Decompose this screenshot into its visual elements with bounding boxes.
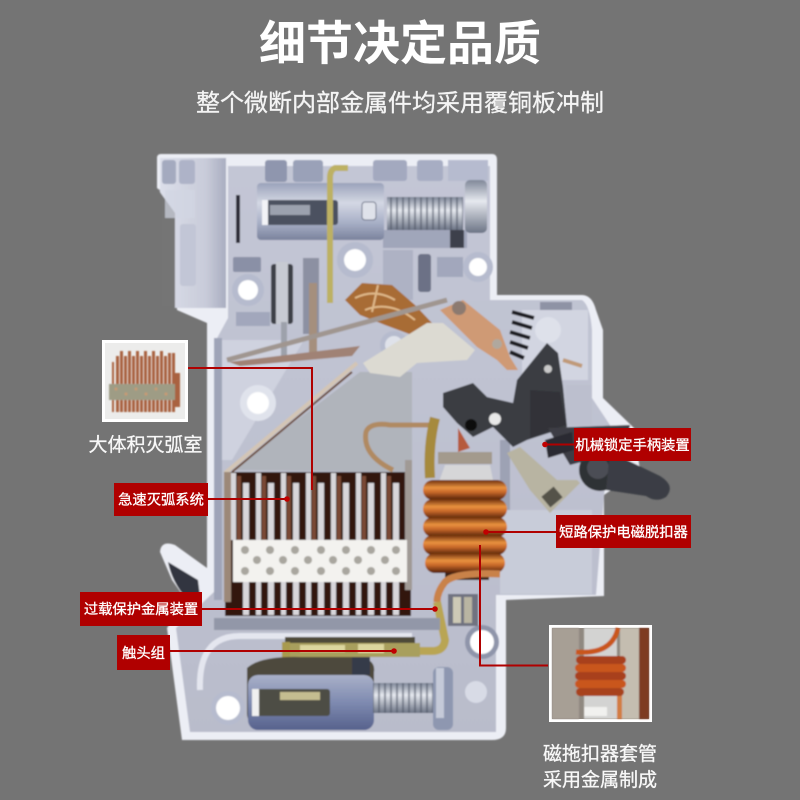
overload brass strip <box>395 602 445 651</box>
left rail <box>214 338 222 600</box>
mounting holes <box>211 242 561 725</box>
right pockets <box>500 302 592 594</box>
bottom contact assembly <box>282 637 420 704</box>
hook latch <box>168 562 200 598</box>
chamber base rib <box>214 618 440 630</box>
white plate <box>233 540 407 582</box>
callout: 急速灭弧系统: 急速灭弧系统 <box>118 492 204 508</box>
callout: 机械锁定手柄装置: 机械锁定手柄装置 <box>575 437 690 454</box>
bottom terminal clamp <box>247 657 453 730</box>
tan slider <box>507 447 580 513</box>
silver contact tip <box>438 452 492 464</box>
thumbnail: magnetic coil sleeve <box>549 625 652 722</box>
yellow coil end <box>430 418 435 478</box>
curved inner wall <box>200 636 412 690</box>
connector line: arc chute callout <box>188 368 312 490</box>
caption: magnetic coil sleeve: 磁拖扣器套管 <box>543 743 657 765</box>
callout: 过载保护金属装置 <box>80 592 438 626</box>
title: 细节决定品质 <box>259 17 541 70</box>
thumbnail: arc chamber <box>102 340 188 422</box>
copper moving arm <box>440 300 518 370</box>
arc chamber grey cavity <box>232 372 412 472</box>
caption: magnetic coil sleeve <box>543 743 657 791</box>
callout: 触头组 <box>117 635 397 670</box>
handle <box>545 425 670 500</box>
callout: 短路保护电磁脱扣器: 短路保护电磁脱扣器 <box>559 524 688 541</box>
diagonal rod <box>227 300 447 360</box>
subtitle: 整个微断内部金属件均采用覆铜板冲制 <box>196 90 604 117</box>
housing outline <box>157 154 640 740</box>
copper link <box>229 346 360 366</box>
housing interior <box>176 166 610 732</box>
callout: 触头组: 触头组 <box>122 645 165 662</box>
caption: arc chamber: 大体积灭弧室 <box>88 434 203 456</box>
brass contact strip <box>330 168 348 303</box>
connector line: coil thumbnail <box>480 545 548 666</box>
black mechanism <box>443 343 567 447</box>
top pockets <box>233 160 488 334</box>
copper hook <box>366 424 432 470</box>
callout: 短路保护电磁脱扣器 <box>483 515 691 548</box>
arc chute <box>224 460 412 616</box>
circuit breaker cutaway <box>157 154 670 740</box>
caption: magnetic coil sleeve: 采用金属制成 <box>543 769 657 791</box>
silver lever <box>363 323 475 377</box>
callout: 急速灭弧系统 <box>114 483 290 516</box>
black spring <box>510 312 534 358</box>
long diagonal rod <box>225 363 357 473</box>
copper braid <box>345 283 432 335</box>
spring post <box>271 262 293 360</box>
left chamber ribs <box>218 340 304 460</box>
top left ribs <box>157 158 226 308</box>
top terminal clamp <box>257 180 487 240</box>
copper pipe <box>437 574 500 602</box>
small bimetal block <box>448 594 478 626</box>
copper coil <box>423 480 507 580</box>
callout: 过载保护金属装置: 过载保护金属装置 <box>84 601 198 618</box>
callout: 机械锁定手柄装置 <box>542 428 691 461</box>
small ceramic tube <box>309 283 317 355</box>
